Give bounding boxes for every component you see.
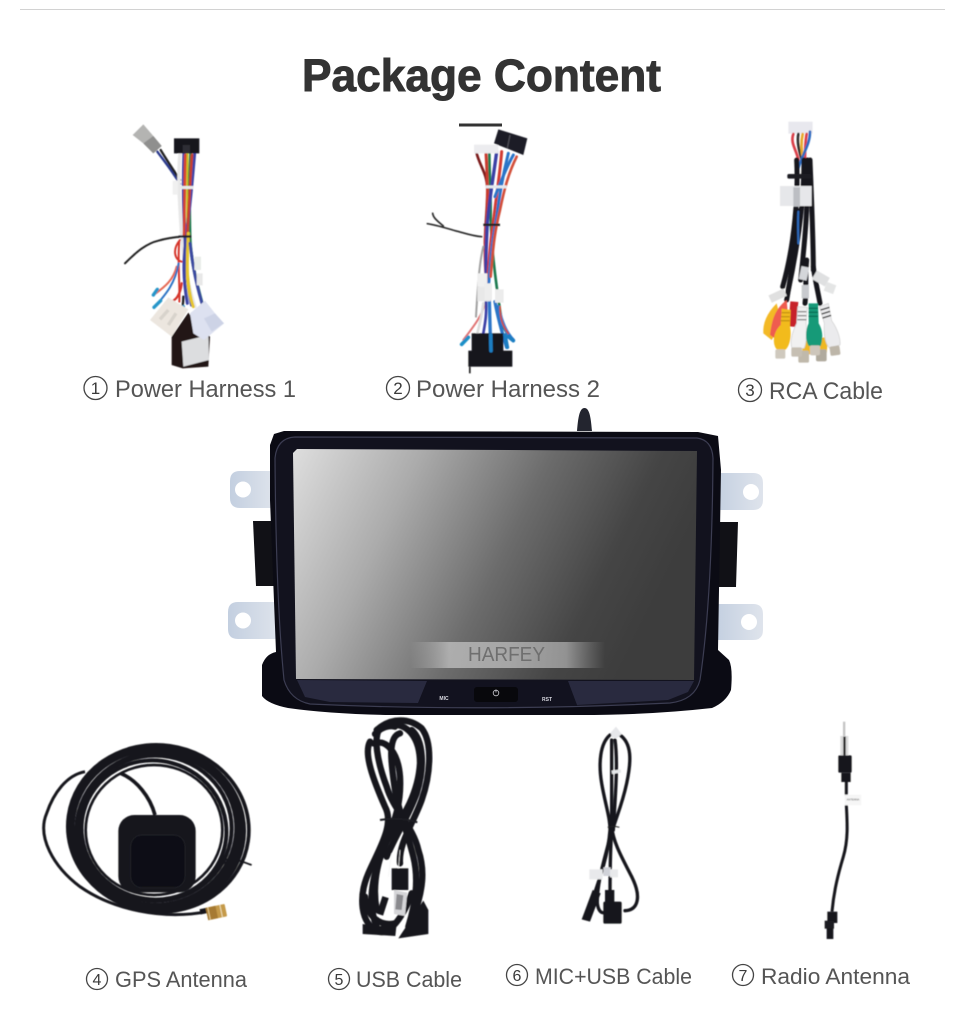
label 2: 2 [393,379,403,398]
label 1: Power Harness 1 [115,376,296,403]
item 6: MIC+USB cable [582,727,637,924]
watermark text: HARFEY [468,644,545,666]
label 4: 4 [93,972,102,989]
control strip: RST [542,697,552,703]
head unit [228,408,763,715]
item 7: radio antenna: ANTENNA [847,798,860,802]
label 4: GPS Antenna [115,967,248,992]
item 4: GPS antenna [44,731,260,926]
back plugs [763,303,782,340]
item 2: power harness 2 [427,129,527,373]
title: Package Content [302,50,661,101]
watermark band [410,642,605,668]
control strip: MIC [439,696,449,702]
item 3: RCA cable [763,122,841,363]
green plug [806,303,822,346]
side blocks [253,521,280,586]
control strip [418,682,577,706]
label 1: 1 [91,379,100,398]
label 3: RCA Cable [769,378,883,405]
outer housing [262,431,732,715]
item 1: power harness 1 [125,124,224,368]
inner frame line [275,437,713,708]
mounting tabs [228,471,763,640]
label 2: Power Harness 2 [416,376,600,403]
label 5: USB Cable [356,967,462,992]
label 3: 3 [745,381,755,400]
label 6: 6 [513,968,522,985]
white plug [791,307,807,348]
lower bezel strips [297,680,427,703]
title underline [459,124,502,126]
item 7: radio antenna [825,722,861,939]
antenna stub [577,408,592,431]
label 7: 7 [739,968,748,985]
screen [293,449,697,680]
label 5: 5 [335,972,344,989]
yellow plug [774,309,791,350]
label 6: MIC+USB Cable [535,964,692,989]
label 7: Radio Antenna [761,964,911,989]
white right plug [819,303,840,348]
item 5: USB cable [362,720,429,938]
